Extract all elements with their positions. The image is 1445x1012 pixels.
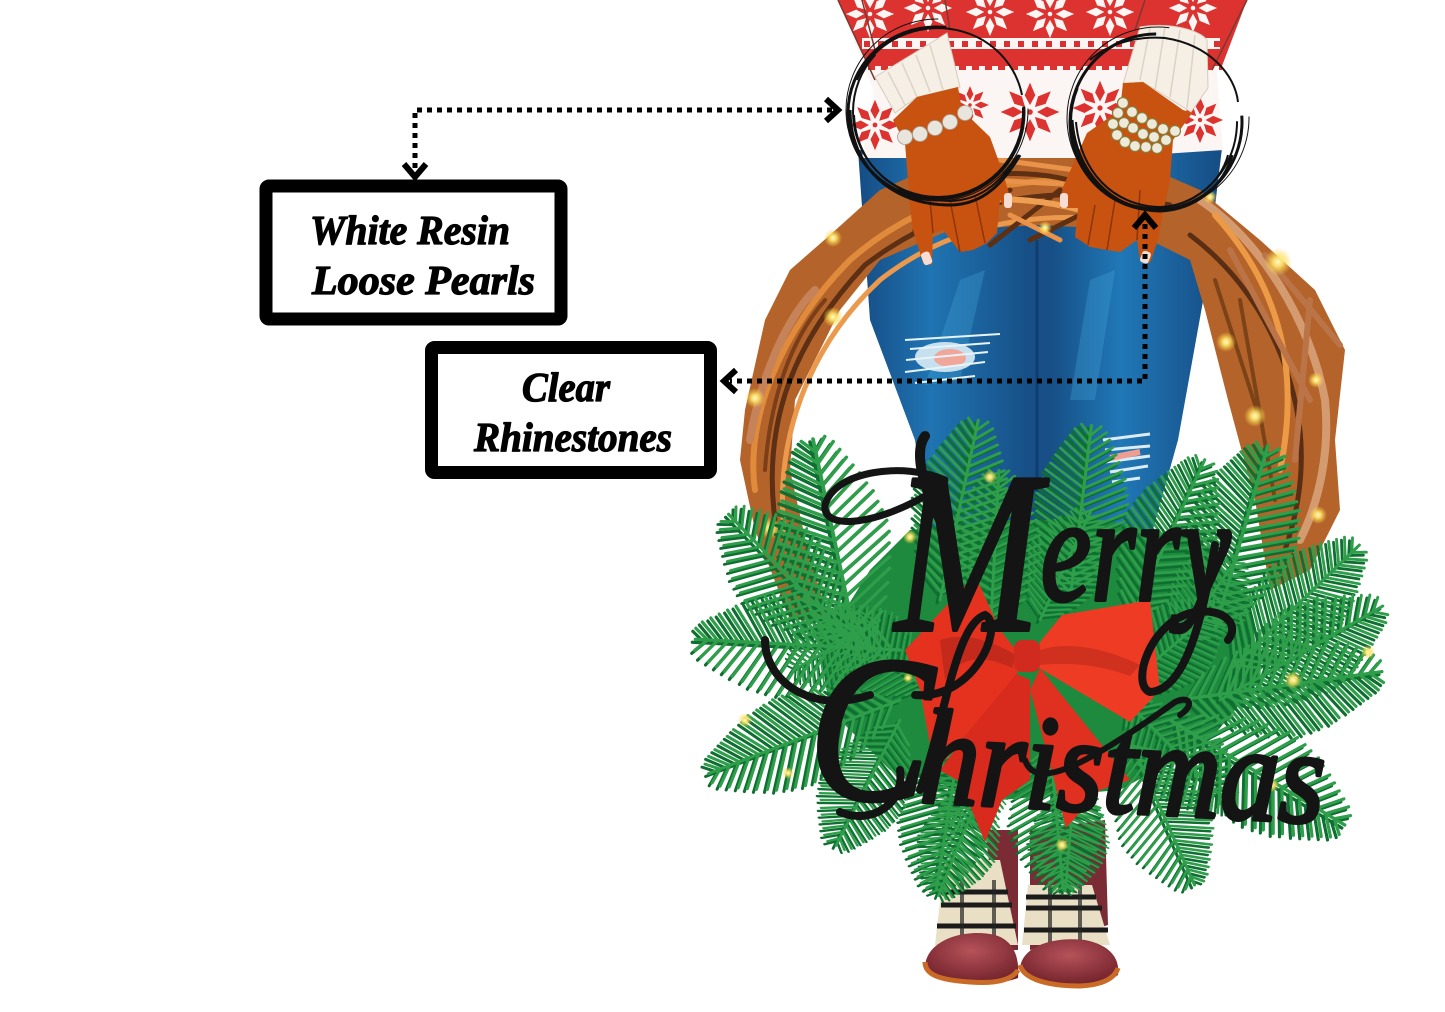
Christmas: Christmas — [804, 610, 1333, 869]
bow tails — [940, 672, 1030, 842]
red bow — [905, 575, 1160, 842]
grapevine wreath — [740, 150, 1345, 620]
sweater: Nordic pattern — [838, 0, 1247, 158]
figure: boots with plaid shafts — [925, 820, 1118, 986]
figure: torn denim jeans — [858, 148, 1222, 540]
dotted arrow: rhinestone bracelet to label — [724, 215, 1156, 392]
label: White Resin Loose Pearls: Loose Pearls — [311, 257, 535, 303]
hand-drawn circle highlighting pearl bracelet — [846, 19, 1028, 205]
lettering flourishes — [765, 436, 1232, 816]
wreath fairy lights — [745, 190, 1327, 539]
left sweater cuff — [875, 33, 960, 113]
fingernails — [920, 193, 1152, 266]
jeans rip: knee — [1103, 434, 1150, 482]
label: Clear Rhinestones — [432, 348, 710, 472]
bow knot — [1014, 640, 1040, 672]
Merry: M — [892, 426, 1049, 681]
label: Clear Rhinestones: Clear — [522, 364, 611, 410]
pine branches — [689, 410, 1406, 914]
bow left wing — [905, 575, 1018, 772]
left hand — [893, 87, 1013, 265]
bow right wing — [1036, 600, 1160, 722]
pearl bracelet — [898, 106, 972, 144]
label: Clear Rhinestones: Rhinestones — [473, 414, 672, 460]
dotted arrow: pearl bracelet to label — [404, 99, 838, 177]
right hand — [1060, 82, 1192, 263]
label: White Resin Loose Pearls: White Resin — [310, 207, 510, 253]
jeans rip: thigh — [905, 334, 1000, 383]
rhinestone bracelet — [1108, 98, 1180, 154]
label: White Resin Loose Pearls — [266, 186, 561, 319]
Merry: erry — [1041, 466, 1231, 633]
right sweater cuff — [1123, 25, 1208, 112]
hand-drawn circle highlighting rhinestone bracelet — [1067, 27, 1249, 211]
Merry Christmas lettering — [765, 426, 1333, 869]
small lights over the branches — [738, 470, 1375, 852]
